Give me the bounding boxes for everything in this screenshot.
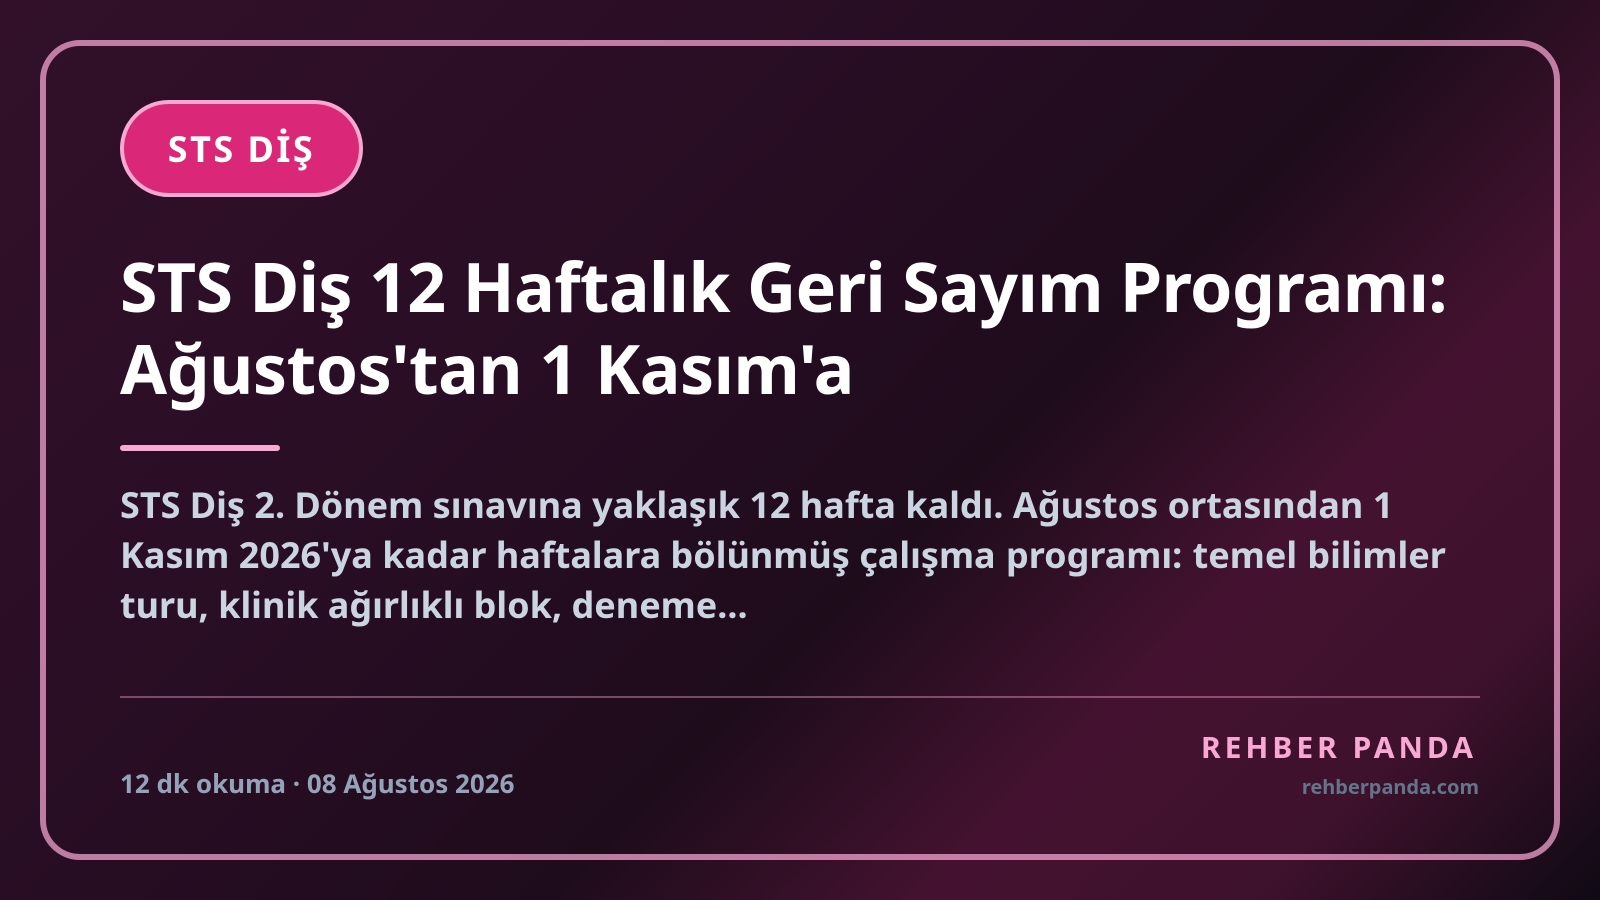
title <box>120 239 1447 414</box>
brand name: REHBER PANDA <box>1201 726 1477 767</box>
category pill: STS DİŞ: STS DİŞ <box>168 124 315 173</box>
description text: STS Diş 2. Dönem sınavına yaklaşık 12 hafta kaldı. Ağustos ortasından 1 <box>120 480 1393 529</box>
description text: Kasım 2026'ya kadar haftalara bölünmüş çalışma programı: temel bilimler <box>120 530 1446 579</box>
accent rule <box>120 445 280 451</box>
description text <box>120 480 1446 629</box>
title: STS Diş 12 Haftalık Geri Sayım Programı: <box>120 239 1447 332</box>
brand url: rehberpanda.com <box>1302 773 1479 800</box>
title: Ağustos'tan 1 Kasım'a <box>120 321 854 414</box>
footer divider <box>120 696 1480 698</box>
description text: turu, klinik ağırlıklı blok, deneme... <box>120 580 748 629</box>
reading time and date: 12 dk okuma · 08 Ağustos 2026 <box>120 765 515 801</box>
category pill: STS DİŞ <box>120 100 363 197</box>
